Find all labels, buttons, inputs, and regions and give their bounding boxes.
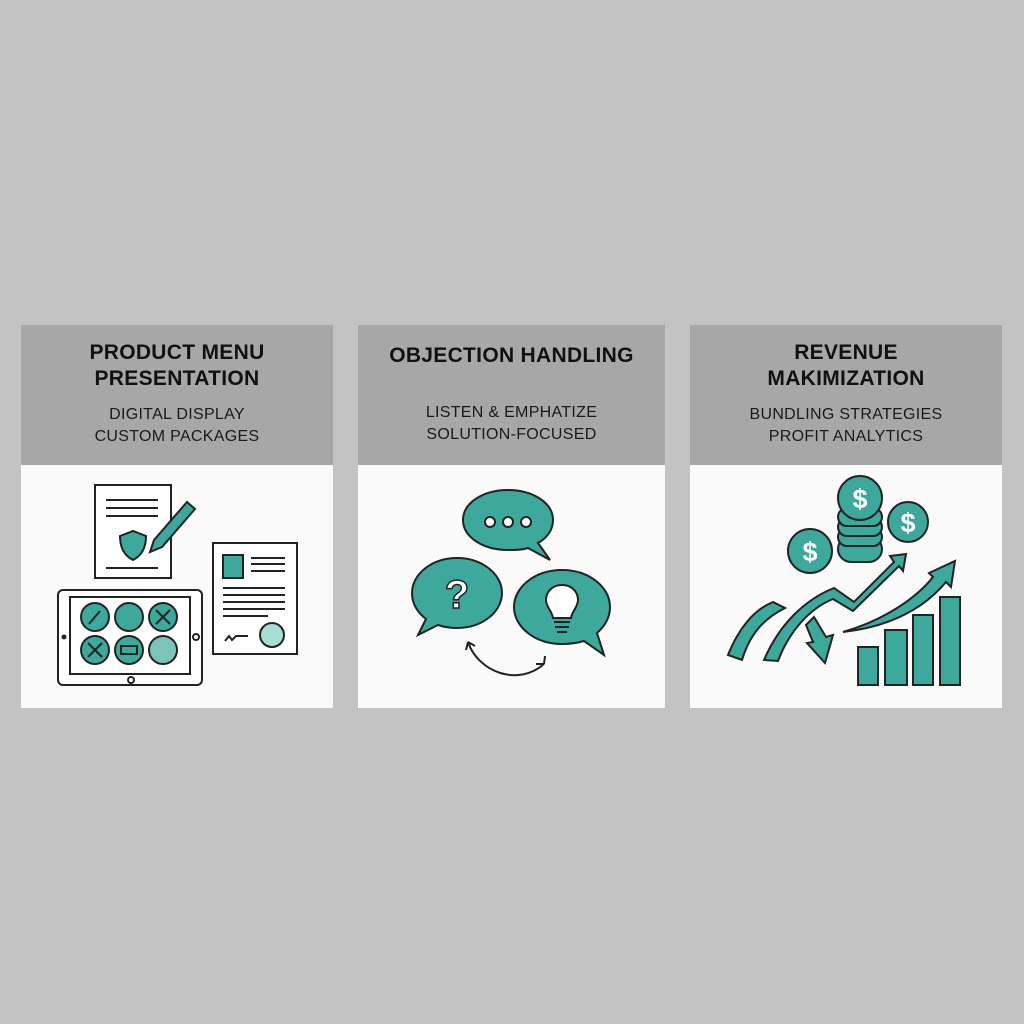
heading: revenue — [690, 325, 1002, 465]
icon: coins arrows and bars: $ — [852, 484, 868, 514]
heading: product menu: PRODUCT MENU — [89, 341, 265, 364]
icon: coins arrows and bars: $ — [802, 537, 818, 567]
heading: revenue: PROFIT ANALYTICS — [769, 428, 923, 445]
icon: speech bubbles: ? — [445, 573, 469, 617]
icon: speech bubbles — [411, 489, 611, 676]
heading: objection handling — [358, 325, 665, 465]
heading: product menu — [21, 325, 333, 465]
heading: product menu: PRESENTATION — [94, 367, 260, 390]
heading: objection handling: OBJECTION HANDLING — [389, 344, 634, 367]
panel: revenue maximization — [690, 325, 1002, 708]
heading: objection handling: LISTEN & EMPHATIZE — [426, 404, 597, 421]
heading: revenue: BUNDLING STRATEGIES — [750, 406, 942, 423]
panel: product menu presentation — [21, 325, 333, 708]
heading: revenue: MAKIMIZATION — [767, 367, 925, 390]
heading: revenue: REVENUE — [794, 341, 898, 364]
heading: product menu: CUSTOM PACKAGES — [95, 428, 259, 445]
heading: product menu: DIGITAL DISPLAY — [109, 406, 245, 423]
panel: objection handling — [358, 325, 665, 708]
heading: objection handling: SOLUTION-FOCUSED — [426, 426, 597, 443]
icon: documents and tablet — [57, 484, 298, 686]
icon: coins arrows and bars — [726, 475, 961, 686]
icon: coins arrows and bars: $ — [900, 508, 916, 538]
